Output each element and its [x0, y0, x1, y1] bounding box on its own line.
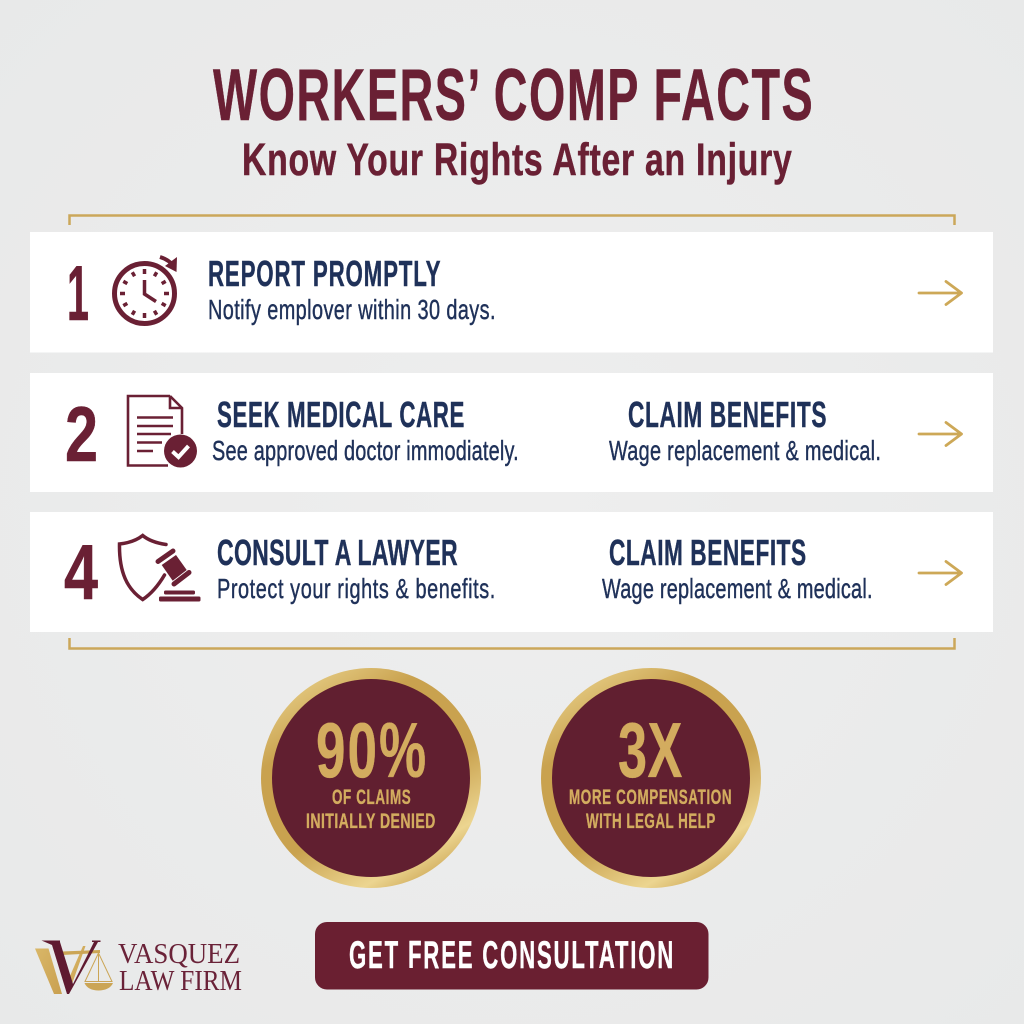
stat badge: 3X: MORE COMPENSATION	[569, 785, 732, 809]
panel: row 2 medical care and benefits	[30, 373, 993, 492]
logo: Vasquez Law Firm	[35, 938, 242, 997]
button: get free consultation	[315, 922, 708, 990]
top gold bracket	[70, 216, 954, 225]
text: see approved doctor: See approved doctor immodiately.	[212, 436, 519, 467]
icon: stopwatch clock	[114, 257, 177, 324]
stat badge: 90%: 90%	[316, 708, 426, 795]
heading: claim benefits: CLAIM BENEFITS	[609, 534, 806, 573]
icon: document with check	[128, 396, 197, 468]
icon: VA monogram with scales	[35, 940, 113, 994]
heading: seek medical care: SEEK MEDICAL CARE	[217, 396, 464, 435]
number 4: 4	[64, 528, 98, 616]
panel: row 4 lawyer and benefits	[30, 512, 993, 632]
button: get free consultation: GET FREE CONSULTATION	[349, 932, 673, 977]
bottom gold bracket	[70, 638, 954, 648]
arrow	[919, 562, 962, 584]
heading: consult a lawyer: CONSULT A LAWYER	[217, 534, 458, 573]
icon: shield with gavel	[119, 536, 200, 602]
stat badge: 90%: INITIALLY DENIED	[306, 809, 435, 833]
stat badge: 3X	[541, 668, 761, 888]
text: Vasquez: VASQUEZ	[118, 938, 240, 970]
stat badge: 90%: OF CLAIMS	[332, 785, 411, 809]
text: Law Firm: LAW FIRM	[119, 965, 242, 997]
text: protect your rights: Protect your rights & benefits.	[217, 574, 495, 605]
number 2: 2	[65, 390, 98, 478]
panel: row 1 report promptly	[30, 232, 993, 352]
arrow	[919, 282, 962, 304]
stat badge: 3X: 3X	[618, 708, 682, 795]
heading: report promptly: REPORT PROMPTLY	[208, 255, 441, 294]
subtitle: Know Your Rights After an Injury	[242, 135, 792, 185]
number 1: 1	[67, 249, 89, 337]
arrow	[919, 422, 962, 446]
text: wage replacement: Wage replacement & medical.	[602, 574, 873, 605]
stat badge: 3X: WITH LEGAL HELP	[586, 809, 715, 833]
text: wage replacement: Wage replacement & medical.	[609, 436, 881, 467]
heading: claim benefits: CLAIM BENEFITS	[628, 396, 826, 435]
text: notify employer: Notify emplover within 30 days.	[208, 295, 496, 326]
title: WORKERS’ COMP FACTS	[213, 54, 813, 135]
stat badge: 90%	[261, 668, 481, 888]
